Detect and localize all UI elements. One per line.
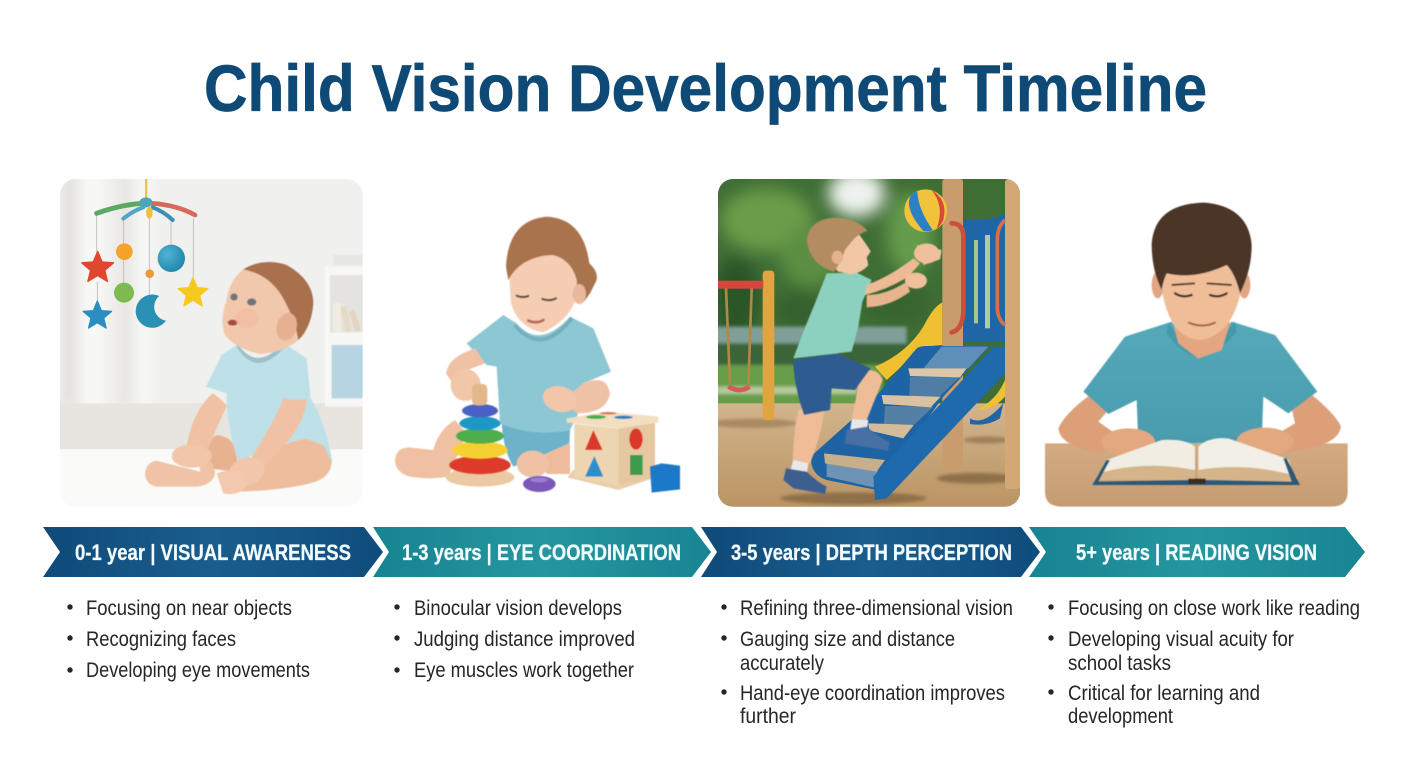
text block: depth perception bullets: Hand-eye coordination improves bbox=[740, 682, 1005, 705]
arrow: 5+ years: 5+ years | READING VISION bbox=[1076, 540, 1317, 565]
text block: eye coordination bullets bbox=[394, 597, 635, 682]
floor and blanket bbox=[60, 403, 363, 507]
icon: table bbox=[1045, 443, 1348, 507]
panel: child on playground photo bbox=[703, 163, 1037, 530]
icon: toddler bbox=[395, 217, 611, 478]
panel: baby looking at mobile photo bbox=[60, 157, 365, 507]
text block: depth perception bullets: Gauging size and distance bbox=[740, 628, 955, 651]
arrow: 5+ years bbox=[1029, 527, 1365, 577]
slide bbox=[875, 302, 1005, 410]
arrow: 3-5 years: 3-5 years | DEPTH PERCEPTION bbox=[731, 540, 1012, 565]
arrow: 3-5 years bbox=[701, 527, 1040, 577]
text block: reading vision bullets: Developing visual acuity for bbox=[1068, 628, 1294, 651]
text block: reading vision bullets: school tasks bbox=[1068, 652, 1171, 675]
text block: reading vision bullets: Focusing on close work like reading bbox=[1068, 597, 1360, 620]
arrow: 1-3 years: 1-3 years | EYE COORDINATION bbox=[402, 540, 681, 565]
text block: depth perception bullets: accurately bbox=[740, 652, 824, 675]
trees and sky bbox=[718, 179, 1007, 327]
text block: visual awareness bullets bbox=[67, 597, 310, 682]
curtains bbox=[61, 179, 127, 403]
text block: depth perception bullets: further bbox=[740, 705, 796, 728]
play structure bbox=[942, 179, 1020, 489]
icon: boy climbing bbox=[783, 218, 942, 494]
title: Child Vision Development Timeline bbox=[204, 51, 1207, 125]
text block: visual awareness bullets: Focusing on near objects bbox=[86, 597, 292, 620]
icon: baby bbox=[145, 262, 333, 494]
icon: shape sorter box bbox=[567, 412, 660, 490]
shelf bbox=[325, 255, 365, 407]
panel: toddler playing with stacking toys bbox=[395, 217, 680, 493]
text block: reading vision bullets bbox=[1048, 597, 1360, 728]
text block: eye coordination bullets: Eye muscles work together bbox=[414, 659, 634, 682]
arrow: 1-3 years bbox=[373, 527, 711, 577]
text block: visual awareness bullets: Developing eye movements bbox=[86, 659, 310, 682]
text block: depth perception bullets: Refining three-dimensional vision bbox=[740, 597, 1013, 620]
icon: blue cube bbox=[650, 463, 680, 493]
icon: purple ring bbox=[523, 476, 556, 492]
text block: reading vision bullets: Critical for learning and bbox=[1068, 682, 1260, 705]
grass and sand bbox=[703, 327, 907, 407]
stairs bbox=[811, 346, 1005, 500]
text block: eye coordination bullets: Judging distance improved bbox=[414, 628, 635, 651]
icon: boy reading bbox=[1058, 203, 1341, 456]
swing set bbox=[718, 271, 774, 420]
arrow: 0-1 year: 0-1 year | VISUAL AWARENESS bbox=[75, 540, 351, 565]
text block: visual awareness bullets: Recognizing faces bbox=[86, 628, 236, 651]
icon: thrown ball bbox=[904, 189, 947, 232]
text block: eye coordination bullets: Binocular vision develops bbox=[414, 597, 622, 620]
icon: hanging mobile bbox=[82, 179, 208, 328]
panel: boy reading a book bbox=[1045, 203, 1348, 507]
text block: reading vision bullets: development bbox=[1068, 705, 1173, 728]
text block: depth perception bullets bbox=[721, 597, 1013, 728]
icon: open book bbox=[1092, 438, 1300, 485]
icon: ring stacker bbox=[446, 384, 514, 487]
arrow: 0-1 year bbox=[43, 527, 383, 577]
